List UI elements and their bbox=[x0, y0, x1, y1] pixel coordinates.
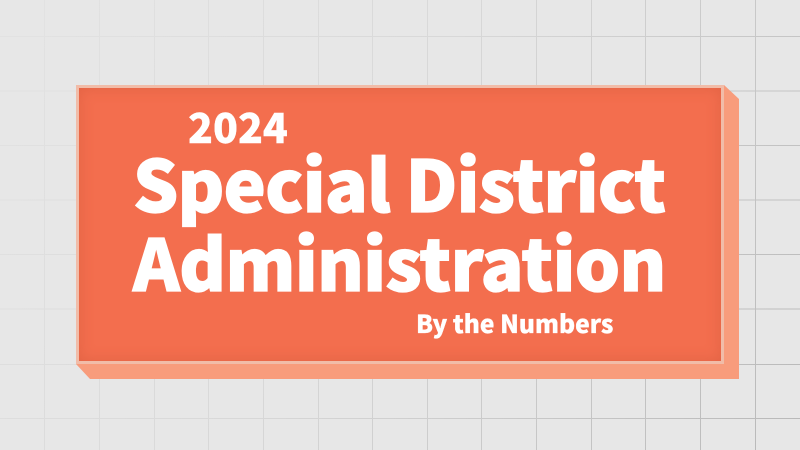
year: 2024 bbox=[188, 95, 288, 155]
title card bbox=[76, 85, 724, 364]
subtitle: By the Numbers bbox=[416, 306, 613, 341]
title line 1: Special District bbox=[133, 131, 665, 233]
title line 2: Administration bbox=[133, 210, 666, 312]
